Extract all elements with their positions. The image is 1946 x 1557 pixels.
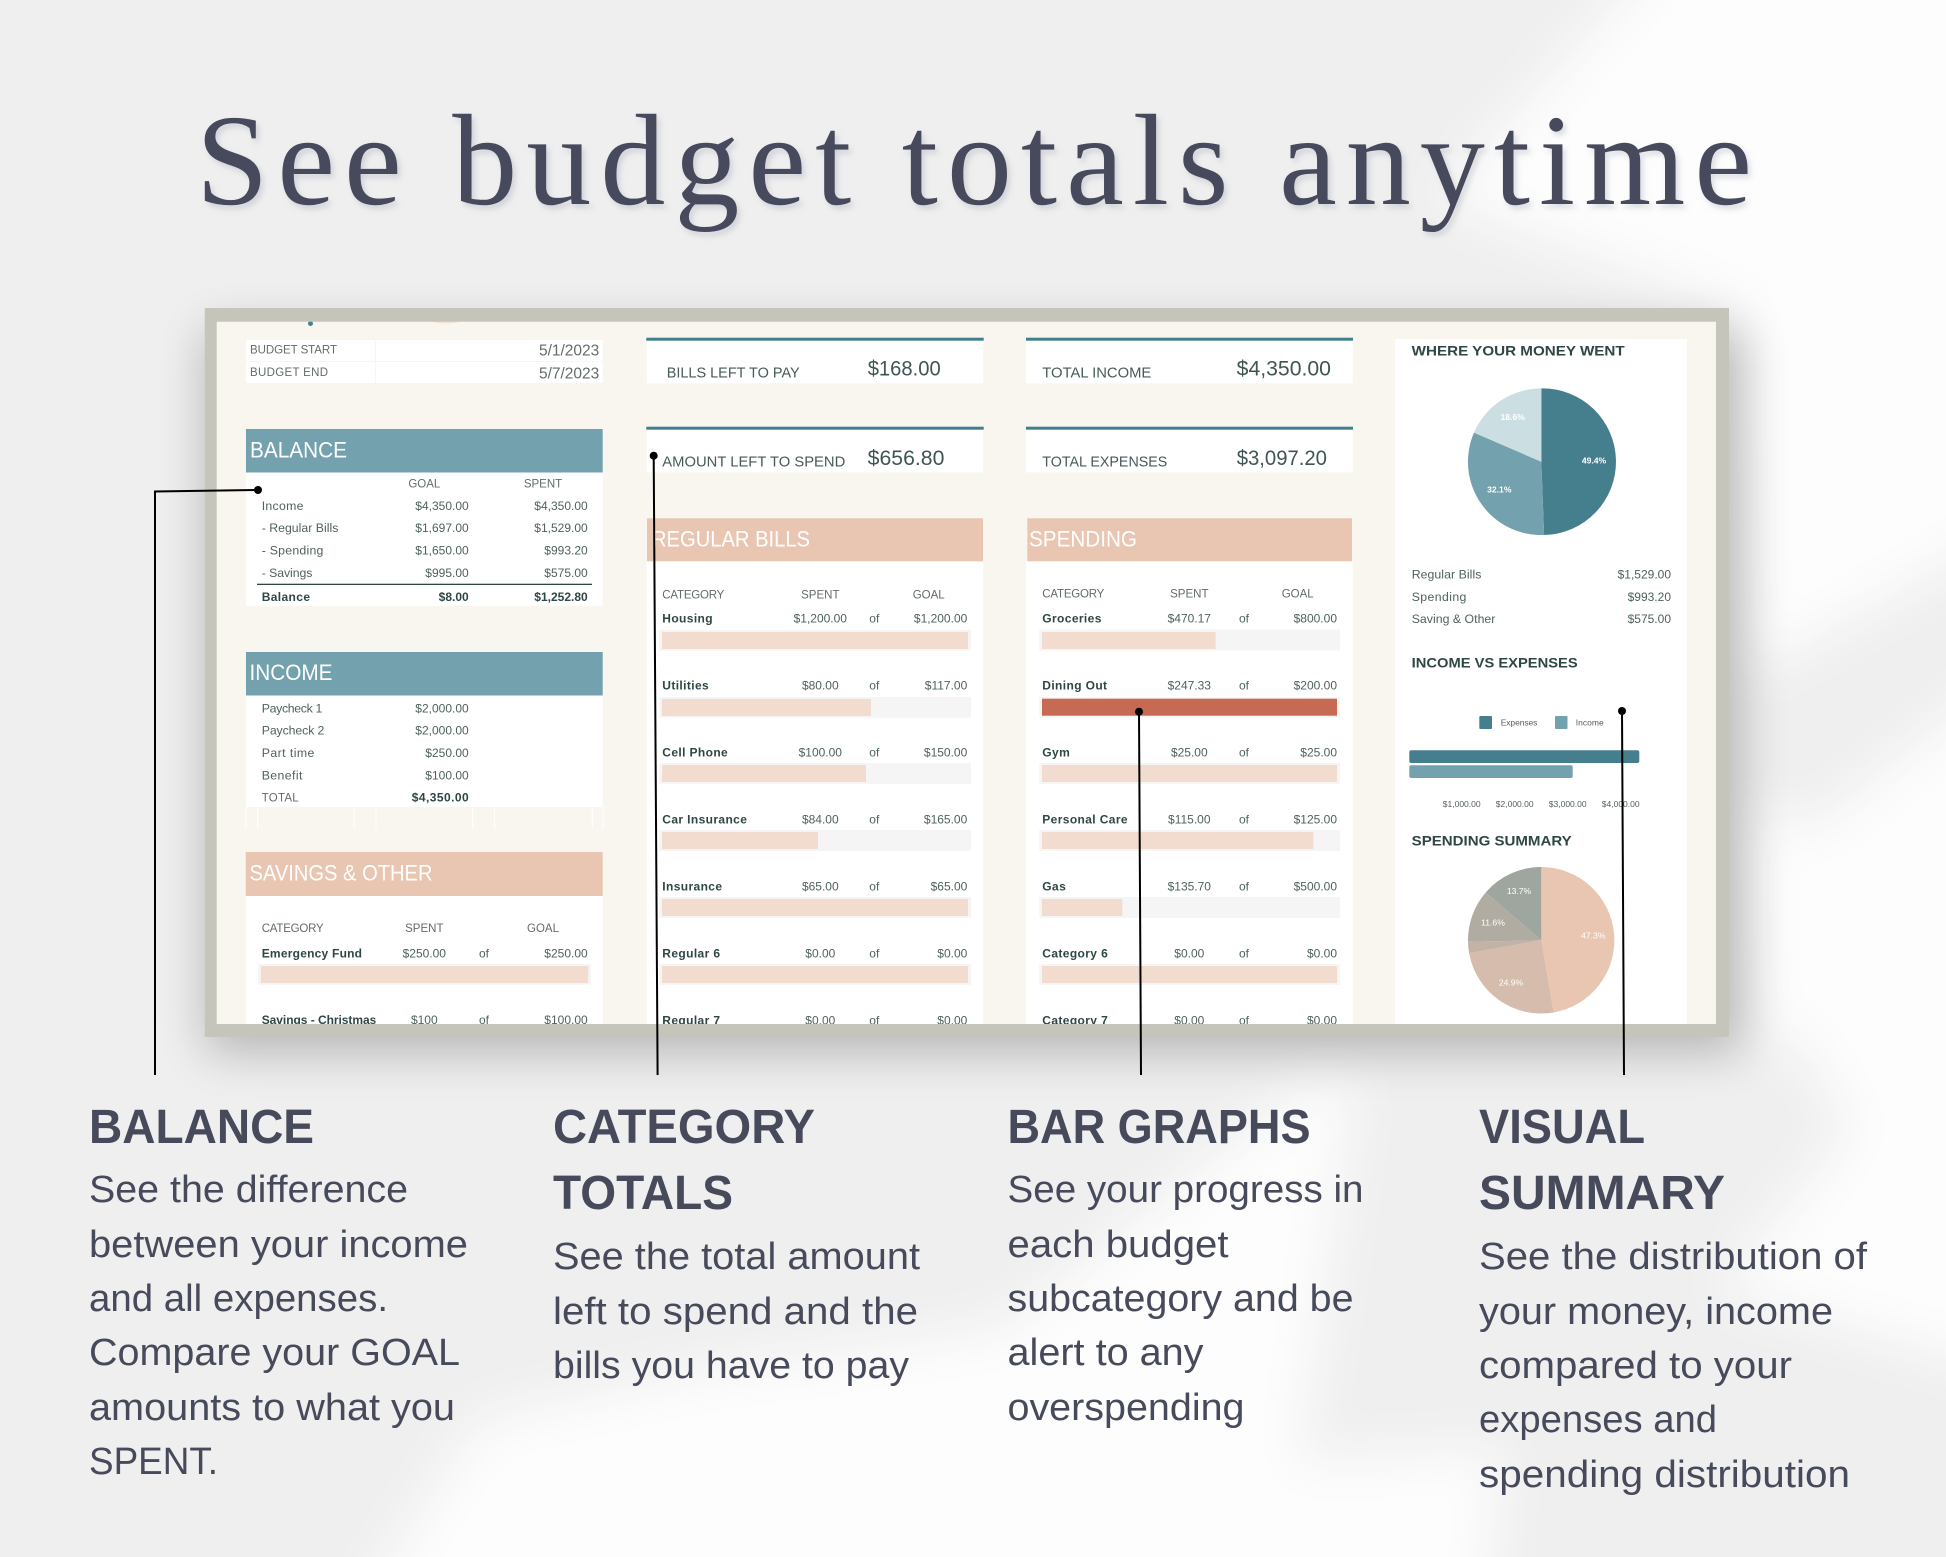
regular bills table: GOAL xyxy=(913,590,945,602)
balance table: $995.00 xyxy=(425,566,469,580)
spending table: CATEGORY xyxy=(1042,588,1105,600)
bar chart: income vs expenses: $2,000.00 xyxy=(1496,799,1534,809)
savings and other table: of xyxy=(479,1013,490,1027)
savings and other table: of xyxy=(479,946,490,960)
pie chart: spending summary: 47.3% xyxy=(1581,931,1606,941)
heading: where your money went: WHERE YOUR MONEY WENT xyxy=(1412,343,1625,359)
summary list: $993.20 xyxy=(1628,590,1671,604)
row: regular 7: Regular 7 xyxy=(662,1013,720,1027)
pie chart: where your money went: 18.6% xyxy=(1501,412,1525,422)
row: regular 6: $0.00 xyxy=(805,946,836,960)
body: visual summary: compared to your xyxy=(1479,1345,1792,1387)
row: groceries: $800.00 xyxy=(1294,612,1337,626)
body: balance: between your income xyxy=(89,1224,468,1266)
row: regular 6 xyxy=(659,946,971,985)
row: cell phone: $150.00 xyxy=(924,746,968,760)
income table: $2,000.00 xyxy=(415,701,469,715)
body: balance: Compare your GOAL xyxy=(89,1332,460,1374)
pie chart: spending summary xyxy=(1468,867,1614,1014)
row: gas xyxy=(1039,879,1340,918)
balance table: $1,252.80 xyxy=(534,590,588,604)
row: housing: $1,200.00 xyxy=(794,612,847,626)
row: cell phone: of xyxy=(869,746,880,760)
pie chart: spending summary: 13.7% xyxy=(1507,886,1532,896)
pie chart: where your money went: 49.4% xyxy=(1582,455,1607,465)
balance table: - Spending xyxy=(262,544,324,558)
budget dates xyxy=(246,340,603,383)
row: insurance: of xyxy=(869,879,880,893)
spreadsheet panel xyxy=(205,308,1742,1052)
row: category 7: Category 7 xyxy=(1042,1013,1108,1027)
row: groceries xyxy=(1039,612,1340,650)
savings and other table: $250.00 xyxy=(544,946,588,960)
title remnants at top edge xyxy=(308,318,460,326)
balance table: - Savings xyxy=(262,566,313,580)
row: cell phone xyxy=(659,746,971,784)
pie chart: spending summary: 11.6% xyxy=(1481,917,1505,927)
row: category 6: $0.00 xyxy=(1174,946,1205,960)
row: utilities: $117.00 xyxy=(925,679,968,693)
pie chart: where your money went xyxy=(1468,388,1616,535)
body: visual summary xyxy=(1479,1236,1867,1496)
row: personal care: Personal Care xyxy=(1042,813,1128,827)
row: car insurance: of xyxy=(869,813,880,827)
row: regular 7: of xyxy=(869,1013,880,1027)
heading: category totals xyxy=(553,1101,815,1220)
spending table: SPENDING xyxy=(1029,527,1137,552)
body: visual summary: your money, income xyxy=(1479,1291,1833,1333)
column: budget, balance, income, savings xyxy=(246,340,603,1027)
row: personal care: $125.00 xyxy=(1294,813,1337,827)
connector arrow: bar graphs xyxy=(1135,708,1143,1075)
balance table: $4,350.00 xyxy=(415,499,469,513)
spending table: GOAL xyxy=(1282,588,1314,600)
row: cell phone: $100.00 xyxy=(799,746,842,760)
row: gym xyxy=(1039,746,1340,784)
body: visual summary: expenses and xyxy=(1479,1399,1717,1441)
income table: INCOME xyxy=(250,660,332,685)
row: regular 7: $0.00 xyxy=(805,1013,836,1027)
income table: Part time xyxy=(262,746,315,760)
row: groceries: Groceries xyxy=(1042,612,1102,626)
bar chart: income vs expenses: Income xyxy=(1576,717,1604,727)
connector arrow: visual summary xyxy=(1618,707,1626,1075)
heading: visual summary xyxy=(1479,1101,1725,1220)
regular bills table: CATEGORY xyxy=(662,590,725,602)
bar chart: income vs expenses xyxy=(1409,716,1640,809)
balance table: $4,350.00 xyxy=(534,499,588,513)
savings and other table: GOAL xyxy=(527,923,560,935)
body: category totals: left to spend and the xyxy=(553,1291,918,1333)
row: gym: $25.00 xyxy=(1300,746,1337,760)
row: cell phone: Cell Phone xyxy=(662,746,728,760)
pie chart: spending summary: 24.9% xyxy=(1499,977,1524,987)
heading: visual summary: SUMMARY xyxy=(1479,1167,1725,1220)
balance table: $1,650.00 xyxy=(415,544,469,558)
savings and other table: Savings - Christmas xyxy=(262,1013,377,1027)
column: bills totals and regular bills xyxy=(646,338,984,1027)
income table: $4,350.00 xyxy=(412,791,469,805)
body: balance: and all expenses. xyxy=(89,1278,388,1320)
savings and other table: CATEGORY xyxy=(262,923,324,935)
row: utilities: Utilities xyxy=(662,679,709,693)
row: dining out (overspent): Dining Out xyxy=(1042,679,1107,693)
row: insurance xyxy=(659,879,971,918)
card: total income: $4,350.00 xyxy=(1237,358,1331,381)
row: regular 7 xyxy=(662,1013,968,1027)
card: bills left to pay: BILLS LEFT TO PAY xyxy=(667,364,800,381)
text block: bar graphs xyxy=(1008,1101,1364,1429)
balance table: Income xyxy=(262,499,304,513)
row: category 6: of xyxy=(1239,946,1250,960)
connector arrow: category totals xyxy=(650,452,658,1075)
savings and other table: SPENT xyxy=(405,923,443,935)
summary list xyxy=(1412,568,1671,626)
income table: Paycheck 2 xyxy=(262,724,325,738)
row: gym: Gym xyxy=(1042,746,1070,760)
heading: visual summary: VISUAL xyxy=(1479,1101,1645,1154)
spending table xyxy=(1026,518,1353,1027)
heading: balance: BALANCE xyxy=(89,1101,314,1154)
balance table xyxy=(246,429,603,606)
balance table: SPENT xyxy=(524,479,562,491)
balance table: GOAL xyxy=(408,479,441,491)
bar chart: income vs expenses: $4,000.00 xyxy=(1602,799,1640,809)
card: total expenses: $3,097.20 xyxy=(1237,447,1327,470)
body: bar graphs: See your progress in xyxy=(1008,1169,1364,1211)
balance table: $993.20 xyxy=(544,544,588,558)
body: balance: See the difference xyxy=(89,1169,408,1211)
row: groceries: of xyxy=(1239,612,1250,626)
row: category 7: of xyxy=(1239,1013,1250,1027)
heading: income vs expenses: INCOME VS EXPENSES xyxy=(1412,655,1578,671)
budget dates: 5/7/2023 xyxy=(539,366,599,383)
summary list: Regular Bills xyxy=(1412,568,1482,582)
row: housing xyxy=(659,612,971,651)
summary list: $575.00 xyxy=(1628,612,1671,626)
body: bar graphs: overspending xyxy=(1008,1387,1244,1429)
body: category totals: bills you have to pay xyxy=(553,1345,909,1387)
row: category 6: Category 6 xyxy=(1042,946,1108,960)
income table: $2,000.00 xyxy=(415,724,469,738)
row: groceries: $470.17 xyxy=(1168,612,1211,626)
row: car insurance: $84.00 xyxy=(802,813,839,827)
row: personal care: $115.00 xyxy=(1168,813,1211,827)
row: category 6 xyxy=(1039,946,1340,985)
row: regular 7: $0.00 xyxy=(937,1013,968,1027)
row: gas: $500.00 xyxy=(1294,879,1337,893)
bar chart: income vs expenses: $3,000.00 xyxy=(1549,799,1587,809)
row: regular 6: of xyxy=(869,946,880,960)
body: category totals xyxy=(553,1236,920,1387)
regular bills table xyxy=(647,518,983,1027)
savings and other table: $100 xyxy=(411,1013,438,1027)
card: amount left to spend: $656.80 xyxy=(868,447,944,470)
card: bills left to pay: $168.00 xyxy=(868,358,941,381)
balance table: $575.00 xyxy=(544,566,588,580)
income table xyxy=(246,652,603,829)
panel frame xyxy=(205,308,1729,1037)
body: bar graphs xyxy=(1008,1169,1364,1429)
row: gym: $25.00 xyxy=(1171,746,1208,760)
row: category 7 xyxy=(1042,1013,1337,1027)
income table: TOTAL xyxy=(262,793,299,805)
regular bills table: SPENT xyxy=(801,590,839,602)
row: regular 6: Regular 6 xyxy=(662,946,720,960)
row: utilities: $80.00 xyxy=(802,679,839,693)
row: gas: $135.70 xyxy=(1168,879,1211,893)
card: bills left to pay xyxy=(646,338,984,383)
row: insurance: $65.00 xyxy=(931,879,968,893)
row: personal care: of xyxy=(1239,813,1250,827)
row: regular 6: $0.00 xyxy=(937,946,968,960)
text block: visual summary xyxy=(1479,1101,1867,1496)
body: category totals: See the total amount xyxy=(553,1236,920,1278)
row: utilities xyxy=(659,679,971,718)
row: dining out (overspent) xyxy=(1039,679,1340,718)
column: income totals and spending xyxy=(1026,338,1353,1027)
income table: Benefit xyxy=(262,768,303,782)
row: personal care xyxy=(1039,813,1340,851)
row: utilities: of xyxy=(869,679,880,693)
card: amount left to spend: AMOUNT LEFT TO SPEND xyxy=(662,453,845,470)
bar chart: income vs expenses: Expenses xyxy=(1501,717,1537,727)
row: dining out (overspent): of xyxy=(1239,679,1250,693)
body: balance: SPENT. xyxy=(89,1441,218,1483)
body: visual summary: spending distribution xyxy=(1479,1454,1850,1496)
row: insurance: $65.00 xyxy=(802,879,839,893)
body: bar graphs: each budget xyxy=(1008,1224,1229,1266)
savings and other table: SAVINGS & OTHER xyxy=(250,861,432,886)
balance table: - Regular Bills xyxy=(262,521,339,535)
row: gas: Gas xyxy=(1042,879,1066,893)
card: total income: TOTAL INCOME xyxy=(1042,364,1151,381)
income table: Paycheck 1 xyxy=(262,701,323,715)
bar chart: income vs expenses: $1,000.00 xyxy=(1443,799,1481,809)
body: bar graphs: subcategory and be xyxy=(1008,1278,1354,1320)
heading: category totals: TOTALS xyxy=(553,1167,733,1220)
heading: bar graphs: BAR GRAPHS xyxy=(1008,1101,1310,1154)
body: bar graphs: alert to any xyxy=(1008,1332,1204,1374)
pie chart: where your money went: 32.1% xyxy=(1487,485,1512,495)
heading: category totals: CATEGORY xyxy=(553,1101,815,1154)
row: car insurance xyxy=(659,813,971,851)
title: See budget totals anytime xyxy=(196,89,1752,233)
card: total expenses xyxy=(1026,427,1353,472)
balance table: $1,529.00 xyxy=(534,521,588,535)
budget dates: BUDGET START xyxy=(250,344,337,356)
card: total expenses: TOTAL EXPENSES xyxy=(1042,453,1167,470)
body: balance xyxy=(89,1169,468,1483)
regular bills table: REGULAR BILLS xyxy=(652,527,810,552)
balance table: BALANCE xyxy=(250,437,347,462)
income table: $250.00 xyxy=(425,746,469,760)
balance table: Balance xyxy=(262,590,310,604)
column: charts xyxy=(1395,339,1687,1024)
card: total income xyxy=(1026,338,1353,383)
body: visual summary: See the distribution of xyxy=(1479,1236,1867,1278)
row: housing: of xyxy=(869,612,880,626)
budget dates: BUDGET END xyxy=(250,367,328,379)
row: gas: of xyxy=(1239,879,1250,893)
row: category 7: $0.00 xyxy=(1174,1013,1205,1027)
row: insurance: Insurance xyxy=(662,879,722,893)
spending table: SPENT xyxy=(1170,588,1208,600)
row: housing: Housing xyxy=(662,612,713,626)
row: gym: of xyxy=(1239,746,1250,760)
body: balance: amounts to what you xyxy=(89,1387,455,1429)
summary list: Spending xyxy=(1412,590,1467,604)
row: dining out (overspent): $247.33 xyxy=(1168,679,1211,693)
balance table: $8.00 xyxy=(439,590,469,604)
row: car insurance: Car Insurance xyxy=(662,813,747,827)
savings and other table xyxy=(246,852,603,1027)
income table: $100.00 xyxy=(425,768,469,782)
text block: balance xyxy=(89,1101,468,1483)
row: dining out (overspent): $200.00 xyxy=(1294,679,1337,693)
savings and other table: $100.00 xyxy=(544,1013,588,1027)
text block: category totals xyxy=(553,1101,920,1387)
panel background xyxy=(205,308,1729,1037)
card: amount left to spend xyxy=(646,427,984,472)
row: category 6: $0.00 xyxy=(1307,946,1337,960)
row: category 7: $0.00 xyxy=(1307,1013,1337,1027)
budget dates: 5/1/2023 xyxy=(539,343,599,360)
balance table: $1,697.00 xyxy=(415,521,469,535)
connector arrow: balance xyxy=(155,486,262,1075)
summary list: Saving & Other xyxy=(1412,612,1496,626)
row: housing: $1,200.00 xyxy=(914,612,968,626)
savings and other table: $250.00 xyxy=(403,946,446,960)
row: car insurance: $165.00 xyxy=(924,813,968,827)
summary list: $1,529.00 xyxy=(1618,568,1671,582)
savings and other table: Emergency Fund xyxy=(262,946,362,960)
heading: spending summary: SPENDING SUMMARY xyxy=(1412,833,1572,849)
